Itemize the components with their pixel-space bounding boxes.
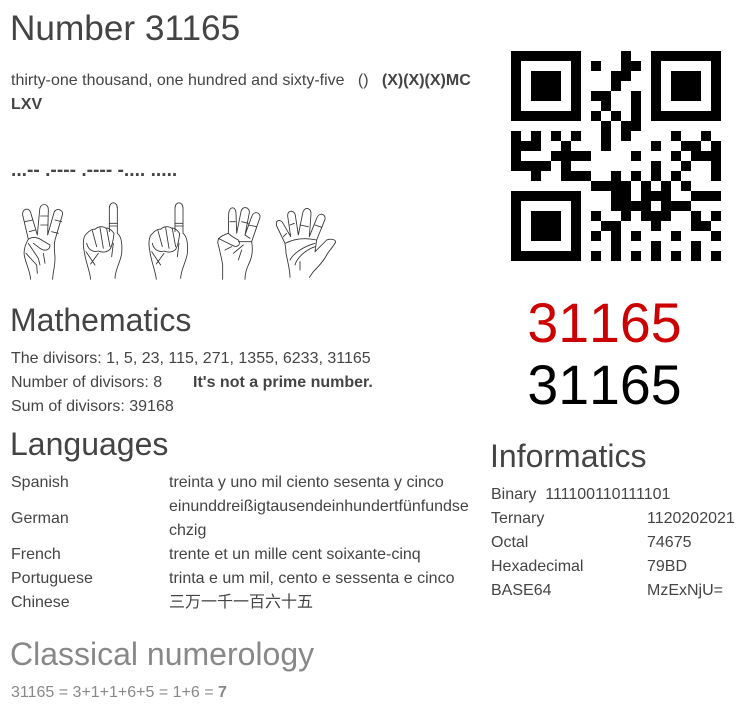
- text: divisors: The divisors: 1, 5, 23, 115, 271, 1355, 6233, 31165: [11, 350, 371, 367]
- table: languages: French: [11, 546, 61, 563]
- table: informatics: Binary 111100110111101: [491, 486, 670, 503]
- icon: hand sign 1: [83, 203, 122, 279]
- table: informatics: BASE64: [491, 582, 551, 599]
- icon: hand sign 3: [23, 204, 63, 279]
- text: number in words and roman numeral: LXV: [11, 96, 42, 113]
- table: informatics: [491, 486, 735, 599]
- text: sum of divisors: Sum of divisors: 39168: [11, 398, 174, 415]
- table: languages: trinta e um mil, cento e sessenta e cinco: [169, 570, 454, 587]
- table: languages: chzig: [169, 522, 206, 539]
- table: languages: Chinese: [11, 594, 70, 611]
- heading: Informatics: Informatics: [490, 438, 646, 474]
- text: number in words and roman numeral: thirty-one thousand, one hundred and sixty-five () (X)(X)(X)MC: [11, 72, 471, 89]
- table: languages: Portuguese: [11, 570, 93, 587]
- icon: sign language hands: [22, 202, 336, 280]
- icon: hand sign 4: [218, 208, 260, 279]
- heading: Mathematics: Mathematics: [10, 302, 191, 338]
- text: morse code: ...-- .---- .---- -.... .....: [11, 160, 177, 181]
- table: informatics: 1120202021: [647, 510, 735, 527]
- table: languages: einunddreißigtausendeinhundertfünfundse: [169, 498, 469, 515]
- table: informatics: 74675: [647, 534, 692, 551]
- table: informatics: 79BD: [647, 558, 687, 575]
- table: languages: 三万一千一百六十五: [169, 594, 313, 611]
- table: informatics: Ternary: [491, 510, 544, 527]
- text: number of divisors and prime note: Number of divisors: 8: [11, 374, 162, 391]
- icon: hand sign 5: [276, 208, 336, 277]
- big number red: 31165: [527, 292, 682, 354]
- table: languages: [11, 474, 469, 611]
- QR code: [511, 51, 721, 261]
- text: number of divisors and prime note: It's not a prime number.: [193, 374, 373, 391]
- title: Number 31165: [10, 9, 240, 48]
- table: informatics: Octal: [491, 534, 528, 551]
- table: languages: trente et un mille cent soixante-cinq: [169, 546, 421, 563]
- table: languages: treinta y uno mil ciento sesenta y cinco: [169, 474, 444, 491]
- table: languages: German: [11, 510, 69, 527]
- table: informatics: Hexadecimal: [491, 558, 583, 575]
- table: languages: Spanish: [11, 474, 69, 491]
- table: informatics: MzExNjU=: [647, 582, 723, 599]
- text: number of divisors and prime note: [11, 374, 373, 391]
- heading: Classical numerology: Classical numerology: [10, 636, 314, 672]
- text: number in words and roman numeral: [11, 72, 471, 113]
- icon: hand sign 1 second: [149, 203, 188, 279]
- big number black: 31165: [527, 354, 682, 416]
- heading: Languages: Languages: [10, 426, 168, 462]
- text: numerology sum: 31165 = 3+1+1+6+5 = 1+6 = 7: [11, 684, 227, 701]
